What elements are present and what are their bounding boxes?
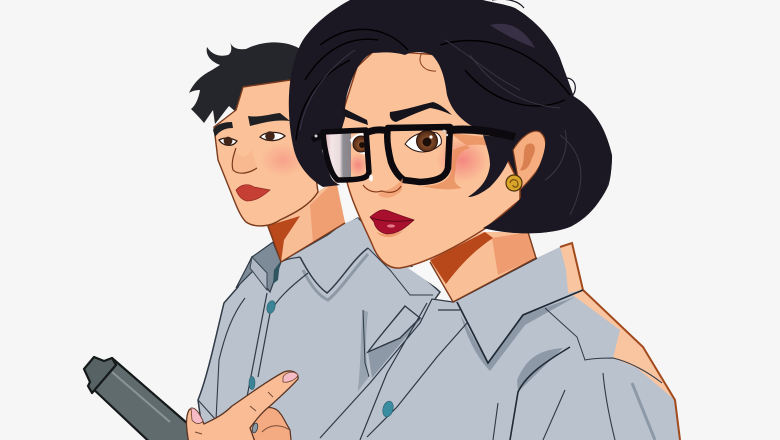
- man collar: [236, 218, 372, 397]
- woman neck: [430, 232, 536, 302]
- hair strands: [296, 29, 570, 140]
- pen: [84, 357, 205, 440]
- nail: index: [283, 372, 298, 382]
- bun loose hair strands: [492, 0, 611, 210]
- shirt gap between fingers: [251, 423, 259, 433]
- cheek blush right: [436, 138, 488, 182]
- man blush: [261, 143, 305, 177]
- woman nose: [363, 174, 403, 198]
- shoulder outline: [560, 243, 680, 440]
- side lock: [468, 135, 515, 197]
- collar shadow: [457, 297, 575, 371]
- nail: thumb: [191, 408, 203, 424]
- woman left lens: [323, 131, 351, 179]
- knuckle lines: [195, 392, 290, 434]
- man face: [214, 80, 318, 226]
- white gap below hair: [341, 186, 358, 220]
- collar left flap: [368, 306, 420, 352]
- man shirt: [198, 218, 440, 440]
- man lips: [236, 185, 270, 201]
- forehead curl: [420, 53, 436, 71]
- gold earring: [506, 175, 522, 191]
- woman lips: [370, 210, 414, 234]
- man figure: [189, 42, 440, 440]
- cheek shadow under glasses: [422, 133, 490, 189]
- man neck: [267, 180, 345, 262]
- shoulder skin tone: [560, 243, 675, 400]
- woman right eye: [405, 130, 441, 152]
- man shoulder seam: [363, 248, 433, 380]
- man nose: [232, 150, 257, 173]
- man hair: [189, 42, 320, 124]
- bun lower over neck: [483, 110, 600, 233]
- button: [381, 400, 395, 418]
- hand pointing: [186, 371, 298, 440]
- white gap beside chin: [408, 262, 445, 288]
- man shirt folds: [198, 298, 245, 420]
- man eyebrows: [213, 113, 290, 137]
- placket lines: [320, 299, 467, 440]
- man shirt shading: [357, 310, 370, 397]
- hair highlight strands: [300, 40, 581, 215]
- sleeve folds: [517, 348, 563, 392]
- woman front hair: [289, 0, 600, 233]
- woman shirt: [320, 243, 680, 440]
- shadow under lips: [376, 230, 404, 237]
- thumb and index finger: [186, 371, 298, 440]
- woman eyebrows: [343, 102, 452, 125]
- curled fingers: [240, 408, 292, 440]
- glasses rivets: [314, 130, 448, 138]
- woman ear: [513, 131, 546, 190]
- woman face: [340, 50, 520, 268]
- woman bun and back hair: [470, 96, 612, 233]
- man shirt buttons: [249, 300, 277, 390]
- woman left eye: [348, 133, 369, 177]
- man eyes: [219, 131, 285, 145]
- collar right: [453, 247, 583, 363]
- glasses: [312, 127, 515, 182]
- placket shadow: [368, 310, 422, 378]
